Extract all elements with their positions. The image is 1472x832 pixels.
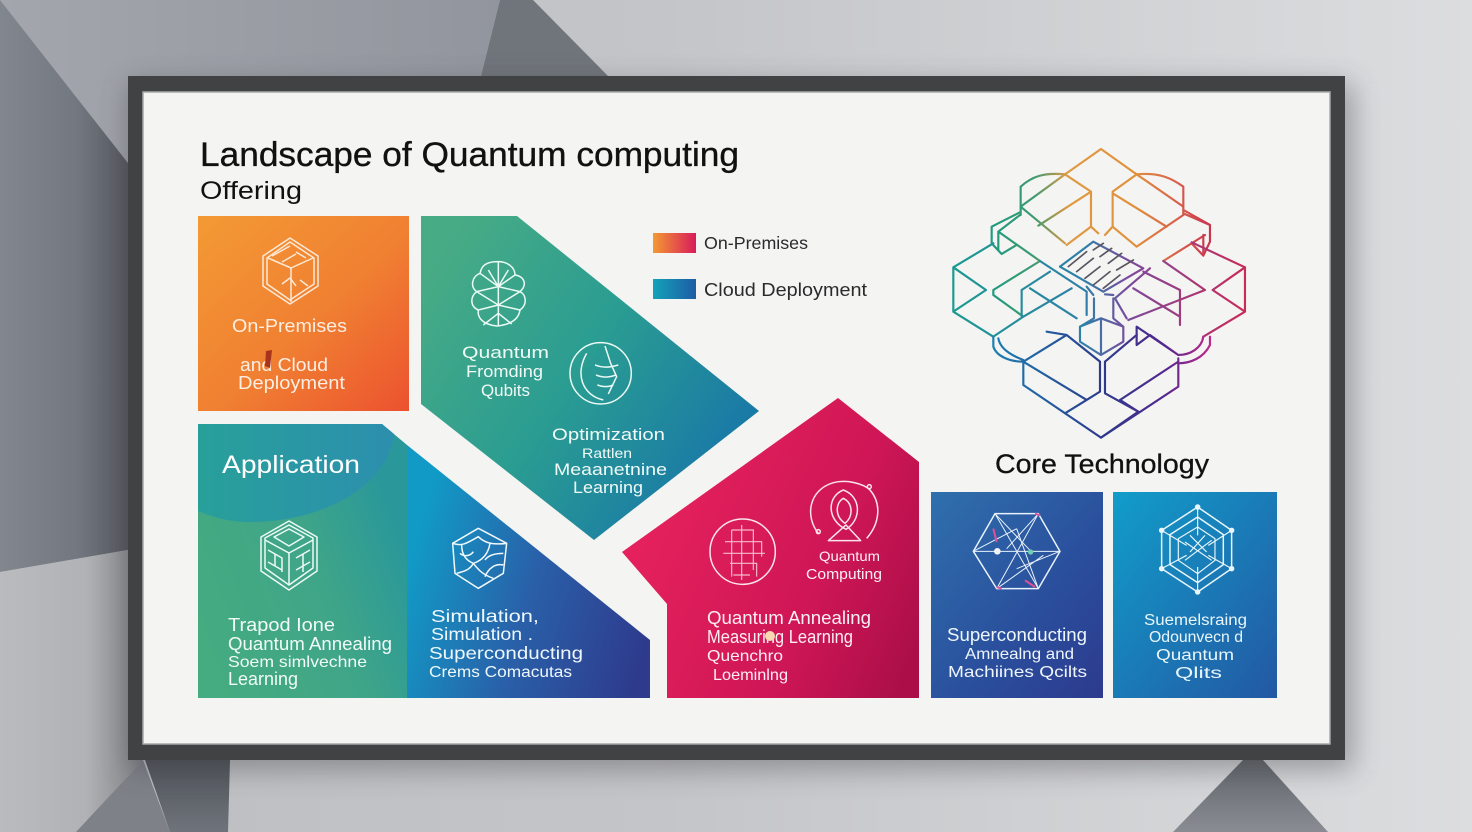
panel: quantum annealing: Quenchro bbox=[707, 648, 783, 665]
panel: quantum computing qubits bbox=[421, 216, 759, 540]
icon: hex lattice bbox=[453, 528, 507, 588]
panel: quantum computing qubits: Quantum bbox=[462, 343, 549, 362]
panel: simulation: Superconducting bbox=[429, 643, 583, 663]
panel: quantum computing qubits: Rattlen bbox=[582, 445, 632, 461]
panel: simulation: Simulation . bbox=[431, 624, 533, 644]
panel: quantum annealing: Quantum Annealing bbox=[707, 608, 871, 628]
icon: cube bbox=[263, 238, 318, 304]
panel: superconducting quantum qubits bbox=[1113, 492, 1277, 698]
panel: application: Quantum Annealing bbox=[228, 634, 392, 654]
lattice: upper cubes bbox=[992, 149, 1210, 317]
icon: chip circle bbox=[710, 519, 775, 584]
panel: superconducting: Amnealng and bbox=[965, 646, 1074, 663]
panel: quantum computing qubits: Qubits bbox=[481, 381, 530, 400]
panel: application bbox=[198, 424, 407, 698]
picture frame bbox=[128, 76, 1345, 760]
panel: quantum annealing bbox=[622, 398, 919, 698]
lattice: lower cubes bbox=[993, 327, 1210, 438]
panel: superconducting quantum qubits: Quantum bbox=[1156, 647, 1234, 664]
frame shadow bbox=[128, 84, 1353, 770]
panel: application: Learning bbox=[228, 669, 298, 689]
panel: quantum computing qubits: Learning bbox=[573, 478, 643, 497]
title: Offering bbox=[200, 177, 302, 205]
icon: crystal bbox=[973, 514, 1060, 589]
panel: quantum annealing: Loeminlng bbox=[713, 667, 788, 684]
panel: on-premises: and Cloud bbox=[240, 354, 328, 375]
legend bbox=[653, 233, 867, 300]
panel: quantum computing qubits: Meaanetnine bbox=[554, 460, 667, 479]
panel: quantum annealing: Computing bbox=[806, 567, 882, 583]
panel: simulation: Crems Comacutas bbox=[429, 664, 572, 681]
panel: superconducting: Machiines Qcilts bbox=[948, 664, 1087, 681]
panel: quantum annealing: Quantum bbox=[819, 548, 880, 564]
lattice: chip hatch bbox=[1068, 243, 1133, 288]
title: Landscape of Quantum computing bbox=[200, 136, 739, 174]
panel: on-premises: Deployment bbox=[238, 372, 345, 393]
icon: atom ring bbox=[811, 481, 878, 541]
panel: application: Soem simlvechne bbox=[228, 654, 367, 671]
panel: simulation: Simulation, bbox=[431, 606, 539, 626]
icon: molecule bbox=[472, 262, 525, 326]
panel: application: Trapod Ione bbox=[228, 615, 335, 635]
icon: cube bbox=[261, 521, 317, 590]
icon: hex cage bbox=[1160, 505, 1234, 594]
panel: superconducting bbox=[931, 492, 1103, 698]
panel: superconducting quantum qubits: Suemelsraing bbox=[1144, 612, 1247, 629]
panel: superconducting: Superconducting bbox=[947, 625, 1087, 645]
icon: core technology cube lattice bbox=[953, 149, 1245, 438]
legend: Cloud Deployment bbox=[704, 279, 867, 300]
panel: quantum annealing: Measuring Learning bbox=[707, 627, 853, 647]
panel: superconducting quantum qubits: Qlits bbox=[1175, 665, 1222, 682]
panel: quantum computing qubits: Fromding bbox=[466, 362, 543, 381]
icon: globe bbox=[570, 343, 631, 404]
panel: simulation bbox=[407, 445, 650, 698]
legend: On-Premises bbox=[704, 233, 808, 253]
panel: superconducting quantum qubits: Odounvecn d bbox=[1149, 629, 1243, 646]
heading: core technology: Core Technology bbox=[995, 449, 1210, 479]
panel: on-premises: On-Premises bbox=[232, 315, 347, 336]
panel: quantum computing qubits: Optimization bbox=[552, 425, 665, 444]
panel: on-premises bbox=[198, 216, 409, 411]
lattice: middle cubes bbox=[953, 242, 1245, 355]
title bbox=[200, 136, 739, 205]
panel: application: Application bbox=[222, 451, 360, 479]
